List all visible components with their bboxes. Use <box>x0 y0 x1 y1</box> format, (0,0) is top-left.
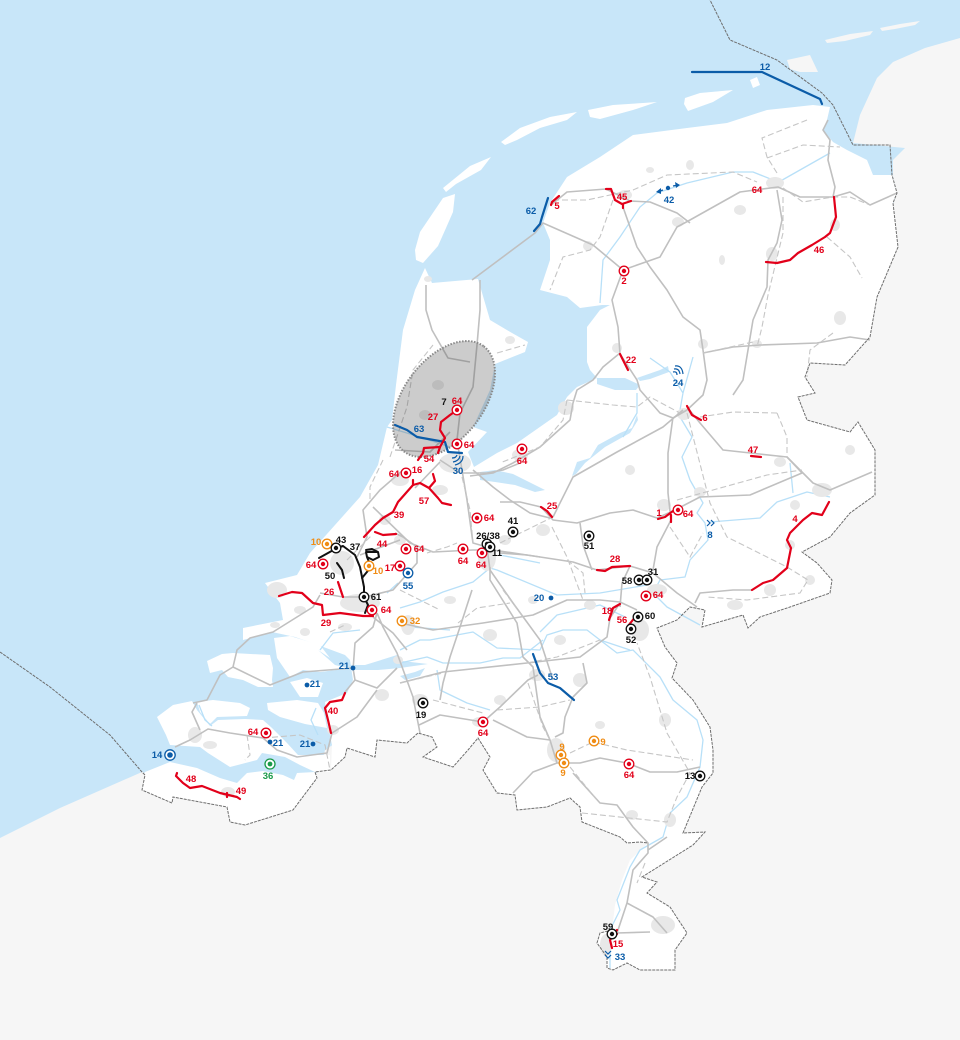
marker 64 Woerden <box>458 544 468 554</box>
line 44 <box>375 532 396 535</box>
labels: 41 <box>508 516 519 527</box>
line 37 and 43 <box>319 546 368 613</box>
line 39 <box>364 480 413 537</box>
line 46 <box>766 197 836 263</box>
study area ellipse <box>372 322 516 476</box>
labels: 8 <box>707 530 713 541</box>
marker 64 Alphen <box>401 544 411 554</box>
line 27 <box>438 410 457 453</box>
line 45 <box>606 189 631 208</box>
marker 10 inland <box>364 561 374 571</box>
labels: 21 <box>273 738 284 749</box>
labels: 64 <box>414 544 425 555</box>
marker 60 <box>633 612 643 622</box>
labels: 37 <box>350 542 360 553</box>
labels: 28 <box>610 554 620 565</box>
marker 17 <box>395 561 405 571</box>
labels: 44 <box>377 539 388 550</box>
labels: 53 <box>548 672 558 683</box>
icon: chevrons 33 <box>605 951 611 958</box>
labels: 24 <box>673 378 684 389</box>
labels: 48 <box>186 774 196 785</box>
labels: 61 <box>371 592 382 603</box>
line 28 <box>597 566 630 571</box>
labels: 4 <box>792 514 798 525</box>
Rottum <box>750 77 760 88</box>
Noord-Beveland <box>197 700 250 724</box>
labels: 21 <box>339 661 350 672</box>
marker 64 Haarlem <box>401 468 411 478</box>
labels: 9 <box>559 742 565 753</box>
labels: 64 <box>248 727 259 738</box>
line 26 <box>338 582 343 597</box>
rivers <box>199 153 830 968</box>
line 6 <box>687 406 701 420</box>
labels: 32 <box>410 616 420 627</box>
marker 19 <box>418 698 428 708</box>
labels: 15 <box>613 939 624 950</box>
line 54 <box>418 447 440 460</box>
marker 2 <box>619 266 629 276</box>
labels: 57 <box>419 496 429 507</box>
labels: 21 <box>300 739 311 750</box>
labels: 45 <box>617 192 628 203</box>
labels: 31 <box>648 567 659 578</box>
marker 51 <box>584 531 594 541</box>
marker 36 <box>265 759 275 769</box>
labels: 26 <box>324 587 334 598</box>
marker 14 <box>165 750 175 760</box>
marker 64 Utrecht <box>477 548 487 558</box>
marker 55 <box>403 568 413 578</box>
labels: 36 <box>263 771 273 782</box>
labels: 17 <box>385 563 395 574</box>
labels: 29 <box>321 618 331 629</box>
labels <box>152 62 824 963</box>
labels: 1 <box>656 508 662 519</box>
labels: 64 <box>683 509 694 520</box>
Schiermonnikoog <box>684 90 733 111</box>
icon: waves 24 <box>673 366 683 375</box>
labels: 42 <box>664 195 674 206</box>
marker 64 Rotterdam <box>367 605 377 615</box>
line 53 <box>533 654 574 700</box>
line 22 <box>620 354 628 370</box>
labels: 27 <box>428 412 438 423</box>
line 5 <box>551 196 559 205</box>
line 37 branch <box>362 549 379 578</box>
towns and urban areas <box>188 160 855 956</box>
Terschelling <box>501 112 577 145</box>
line 57 <box>413 474 451 505</box>
labels: 64 <box>458 556 469 567</box>
marker 64 Helmond <box>624 759 634 769</box>
labels: 33 <box>615 952 625 963</box>
labels: 50 <box>325 571 335 582</box>
marker 64 Amsterdam <box>452 439 462 449</box>
Overflakkee <box>274 636 352 677</box>
marker 52 <box>626 624 636 634</box>
Tholen <box>267 700 327 728</box>
labels: 51 <box>584 541 595 552</box>
labels: 46 <box>814 245 824 256</box>
labels: 64 <box>484 513 495 524</box>
marker 9 north <box>556 750 566 760</box>
Sint Philipsland <box>290 678 323 697</box>
land: Netherlands <box>142 77 898 970</box>
labels: 25 <box>547 501 558 512</box>
labels: 5 <box>554 201 560 212</box>
line 48 and 49 <box>176 773 240 799</box>
line 62 <box>534 198 548 231</box>
labels: 43 <box>336 535 346 546</box>
marker 11 <box>485 542 495 552</box>
labels: 22 <box>626 355 636 366</box>
marker 64 Arnhem <box>641 591 651 601</box>
labels: 64 <box>517 456 528 467</box>
labels: 64 <box>389 469 400 480</box>
labels: 64 <box>478 728 489 739</box>
line 25 <box>541 507 552 517</box>
marker 64 Den Haag <box>318 559 328 569</box>
labels: 21 <box>310 679 321 690</box>
labels: 39 <box>394 510 404 521</box>
labels: 64 <box>306 560 317 571</box>
labels: 10 <box>373 566 383 577</box>
Zeeuws-Vlaanderen <box>142 762 317 825</box>
marker 64 Lelystad <box>517 444 527 454</box>
labels: 64 <box>476 560 487 571</box>
labels: 64 <box>653 590 664 601</box>
labels: 54 <box>424 454 435 465</box>
labels: 11 <box>492 548 503 559</box>
marker 9 east <box>589 736 599 746</box>
labels: 26/38 <box>476 531 500 542</box>
labels: 19 <box>416 710 426 721</box>
labels: 55 <box>403 581 414 592</box>
marker 10 coast <box>322 539 332 549</box>
line 29 <box>279 592 373 616</box>
labels: 56 <box>617 615 627 626</box>
line 1 <box>658 511 673 522</box>
marker 64 Zeeland <box>261 728 271 738</box>
labels: 59 <box>603 922 613 933</box>
labels: 6 <box>702 413 708 424</box>
labels: 62 <box>526 206 536 217</box>
line 47 <box>751 456 761 457</box>
labels: 47 <box>748 445 758 456</box>
icon: waves 30 <box>452 455 463 465</box>
labels: 64 <box>452 396 463 407</box>
Texel <box>415 194 455 263</box>
German islands <box>787 21 920 72</box>
Vlieland <box>443 157 491 192</box>
labels: 63 <box>414 424 424 435</box>
labels: 52 <box>626 635 636 646</box>
labels: 18 <box>602 606 612 617</box>
Walcheren and Zuid-Beveland <box>157 701 330 772</box>
marker 13 <box>695 771 705 781</box>
line 12 <box>692 72 822 104</box>
marker 64 Breda <box>478 717 488 727</box>
marker 31 <box>642 575 652 585</box>
line 18 <box>609 604 620 620</box>
line 50 <box>337 563 344 578</box>
marker 64 Hoorn <box>452 405 462 415</box>
icon: chevrons 8 <box>707 520 714 526</box>
labels: 58 <box>622 576 632 587</box>
marker 9 south <box>559 758 569 768</box>
labels: 20 <box>534 593 544 604</box>
Goeree <box>207 653 273 687</box>
marker 59 <box>607 929 617 939</box>
labels: 12 <box>760 62 770 73</box>
line 15 <box>610 930 617 948</box>
labels: 64 <box>381 605 392 616</box>
labels: 10 <box>311 537 321 548</box>
labels: 9 <box>560 768 566 779</box>
labels: 49 <box>236 786 246 797</box>
line 63 <box>395 425 462 453</box>
labels: 64 <box>624 770 635 781</box>
labels: 7 <box>441 397 447 408</box>
marker 64 Hilversum <box>472 513 482 523</box>
labels: 14 <box>152 750 163 761</box>
icon: arrows 42 <box>656 182 680 194</box>
labels: 16 <box>412 465 422 476</box>
line 4 <box>752 502 829 590</box>
labels: 60 <box>645 611 655 622</box>
labels: 64 <box>752 185 763 196</box>
lakes and estuaries <box>318 366 669 680</box>
line 40 <box>325 693 345 733</box>
marker 61 <box>359 592 369 602</box>
Ameland <box>588 102 657 119</box>
motorways <box>175 120 897 933</box>
marker 58 <box>634 575 644 585</box>
labels: 9 <box>600 737 606 748</box>
railways and planned roads <box>245 120 870 883</box>
blue dots project 21 and 20 <box>268 596 553 746</box>
labels: 2 <box>621 276 627 287</box>
labels: 13 <box>685 771 695 782</box>
marker 41 <box>508 527 518 537</box>
marker 43 <box>331 543 341 553</box>
marker 32 <box>397 616 407 626</box>
labels: 30 <box>453 466 463 477</box>
labels: 40 <box>328 706 338 717</box>
marker 26/38 <box>482 539 492 549</box>
line 56 <box>628 616 636 626</box>
marker 64 Deventer <box>673 505 683 515</box>
labels: 64 <box>464 440 475 451</box>
